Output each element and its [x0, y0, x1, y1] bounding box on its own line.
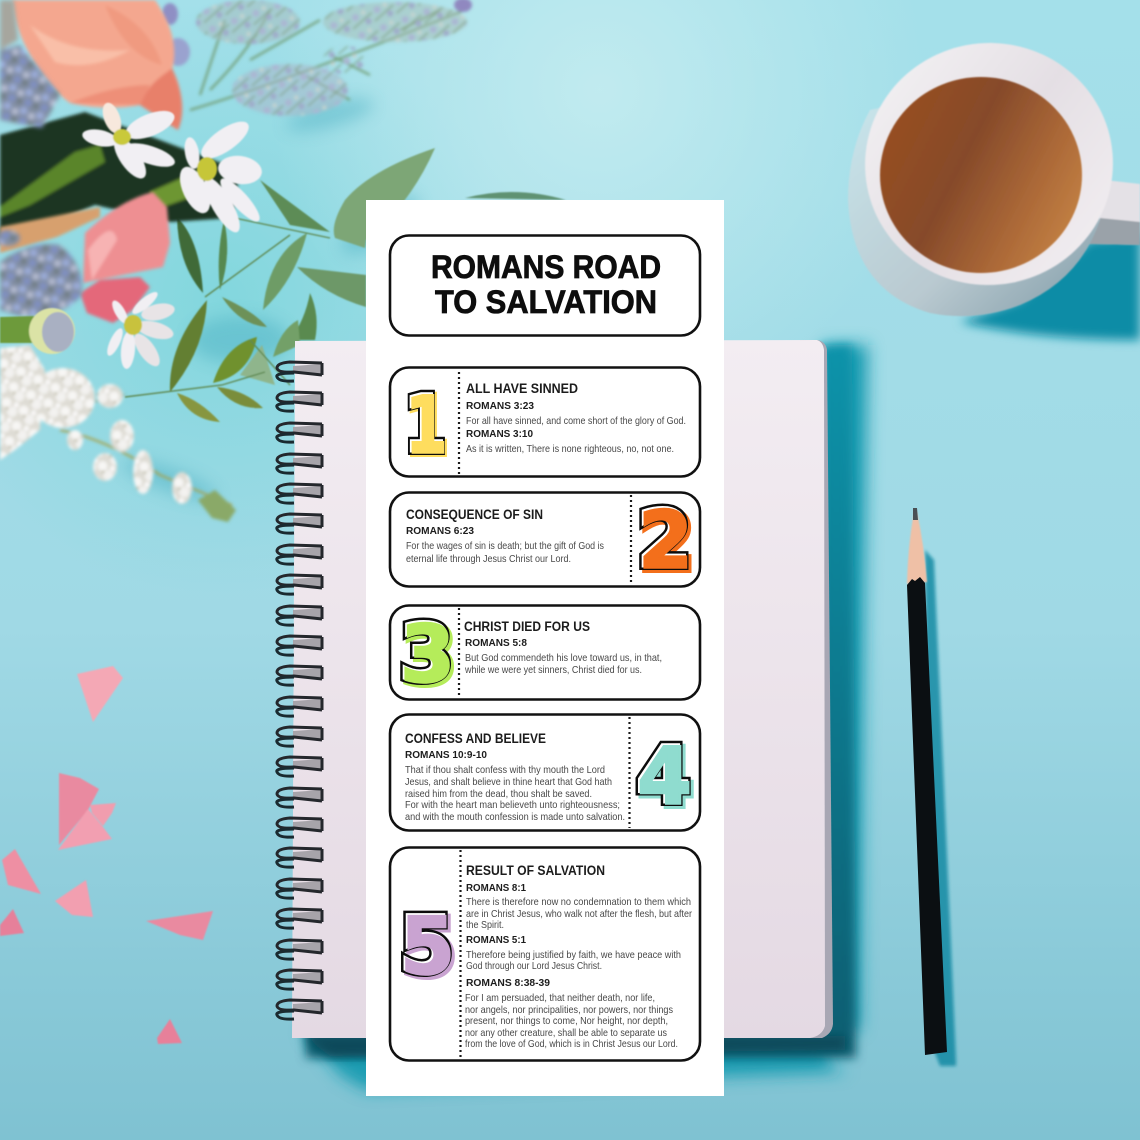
lavender cluster — [0, 230, 82, 317]
panel 5 text: God through our Lord Jesus Christ. — [466, 961, 602, 972]
lavender behind rose — [0, 0, 60, 128]
number 3: 3 — [399, 609, 453, 699]
pencil — [907, 508, 956, 1066]
panel 4 text — [405, 731, 625, 823]
panel 2 text: CONSEQUENCE OF SIN — [406, 507, 543, 522]
number 3: 3 — [399, 609, 453, 699]
peach rose — [12, 0, 182, 130]
panel 4 text: For with the heart man believeth unto righteousness; — [405, 800, 620, 811]
panel 1 text: ALL HAVE SINNED — [466, 381, 578, 396]
title panel — [390, 236, 700, 336]
number 5: 5 — [399, 901, 453, 991]
panel 5 text: Therefore being justified by faith, we have peace with — [466, 950, 681, 961]
panel 4: confess and believe — [390, 714, 700, 830]
title text: ROMANS ROAD — [431, 249, 661, 285]
pink paper scraps — [0, 666, 213, 1044]
panel 3 text: But God commendeth his love toward us, in that, — [465, 653, 662, 664]
panel 1 text: For all have sinned, and come short of the glory of God. — [466, 416, 686, 427]
panel 5 text: There is therefore now no condemnation to them which — [466, 897, 691, 908]
panel 5 text: nor angels, nor principalities, nor powers, nor things — [465, 1005, 673, 1016]
panel 4 text: That if thou shalt confess with thy mouth the Lord — [405, 765, 605, 776]
panel 2 text: For the wages of sin is death; but the gift of God is — [406, 541, 604, 552]
panel 4 text: Jesus, and shalt believe in thine heart that God hath — [405, 777, 612, 788]
panel 5 text: RESULT OF SALVATION — [466, 863, 605, 878]
panel 3 text: while we were yet sinners, Christ died for us. — [464, 665, 642, 676]
number 4: 4 — [636, 731, 690, 821]
panel 3 text — [464, 619, 662, 676]
panel 1 text: As it is written, There is none righteous, no, not one. — [466, 444, 674, 455]
panel 2 text: eternal life through Jesus Christ our Lord. — [406, 554, 571, 565]
panel 2 text — [406, 507, 604, 565]
panel 1 text — [466, 381, 686, 455]
number 5: 5 — [402, 904, 456, 994]
mug shadow — [960, 235, 1140, 340]
panel 5 text: from the love of God, which is in Christ Jesus our Lord. — [465, 1039, 678, 1050]
pencil shadow — [925, 550, 956, 1066]
panel 2 text: ROMANS 6:23 — [406, 526, 474, 537]
white daisies — [81, 100, 265, 370]
notebook — [277, 340, 868, 1090]
panel 5 text — [465, 863, 693, 1050]
panel 5 text: nor any other creature, shall be able to separate us — [465, 1028, 667, 1039]
number 1: 1 — [406, 382, 448, 472]
number 5: 5 — [400, 902, 455, 992]
panel 3: christ died for us — [390, 606, 700, 702]
notebook paper — [292, 340, 825, 1038]
mug handle — [1088, 180, 1140, 245]
number 2: 2 — [638, 496, 693, 586]
mug body — [848, 80, 1100, 316]
panel 5 text: For I am persuaded, that neither death, nor life, — [465, 993, 655, 1004]
number 3: 3 — [402, 612, 456, 702]
panel 1 text: ROMANS 3:10 — [466, 429, 533, 440]
coffee mug — [848, 27, 1140, 340]
shadows under foliage — [119, 92, 427, 508]
number 2: 2 — [637, 495, 691, 585]
panel 5 text: ROMANS 5:1 — [466, 935, 526, 946]
panel 4 text: raised him from the dead, thou shalt be saved. — [405, 789, 592, 800]
number 2: 2 — [640, 498, 694, 588]
pink carnation — [0, 192, 170, 323]
mug rim — [849, 27, 1129, 301]
panel 5 text: ROMANS 8:1 — [466, 883, 526, 894]
bud — [0, 308, 75, 354]
white blossom sprig — [0, 345, 236, 522]
panel 4 text: CONFESS AND BELIEVE — [405, 731, 546, 746]
panel 5 text: the Spirit. — [466, 920, 504, 931]
number 1: 1 — [404, 380, 446, 470]
number 3: 3 — [400, 610, 455, 700]
panel 5 text: present, nor things to come, Nor height, nor depth, — [465, 1016, 668, 1027]
panel 4 text: ROMANS 10:9-10 — [405, 750, 487, 761]
panel 2: consequence of sin — [390, 492, 700, 588]
bookmark card — [366, 200, 724, 1096]
number 4: 4 — [636, 731, 690, 821]
panel 1: all have sinned — [390, 368, 700, 476]
flower bouquet — [0, 0, 566, 522]
spiral binding — [277, 362, 322, 1019]
pencil wood tip — [907, 512, 927, 584]
panel 1 text: ROMANS 3:23 — [466, 401, 534, 412]
number 1: 1 — [406, 382, 448, 472]
notebook shadow — [303, 345, 868, 1090]
panel 4 text: and with the mouth confession is made unto salvation. — [405, 812, 625, 823]
panel 5: result of salvation — [390, 848, 700, 1060]
panel 3 text: ROMANS 5:8 — [465, 638, 527, 649]
panel 5 text: are in Christ Jesus, who walk not after the flesh, but after — [466, 909, 693, 920]
number 5: 5 — [399, 901, 453, 991]
pencil lead — [913, 508, 918, 520]
top sprig — [162, 0, 472, 116]
leaves and stems — [125, 148, 566, 422]
panel 3 text: CHRIST DIED FOR US — [464, 619, 590, 634]
tea — [880, 77, 1082, 273]
number 2: 2 — [637, 495, 691, 585]
title text: TO SALVATION — [435, 284, 657, 320]
notebook page stack — [800, 340, 833, 1038]
number 4: 4 — [638, 732, 692, 822]
dark stem band — [0, 112, 240, 245]
number 1: 1 — [404, 380, 446, 470]
panel 5 text: ROMANS 8:38-39 — [466, 978, 550, 989]
title text — [431, 249, 661, 320]
number 4: 4 — [639, 734, 693, 824]
pencil body — [907, 577, 947, 1055]
